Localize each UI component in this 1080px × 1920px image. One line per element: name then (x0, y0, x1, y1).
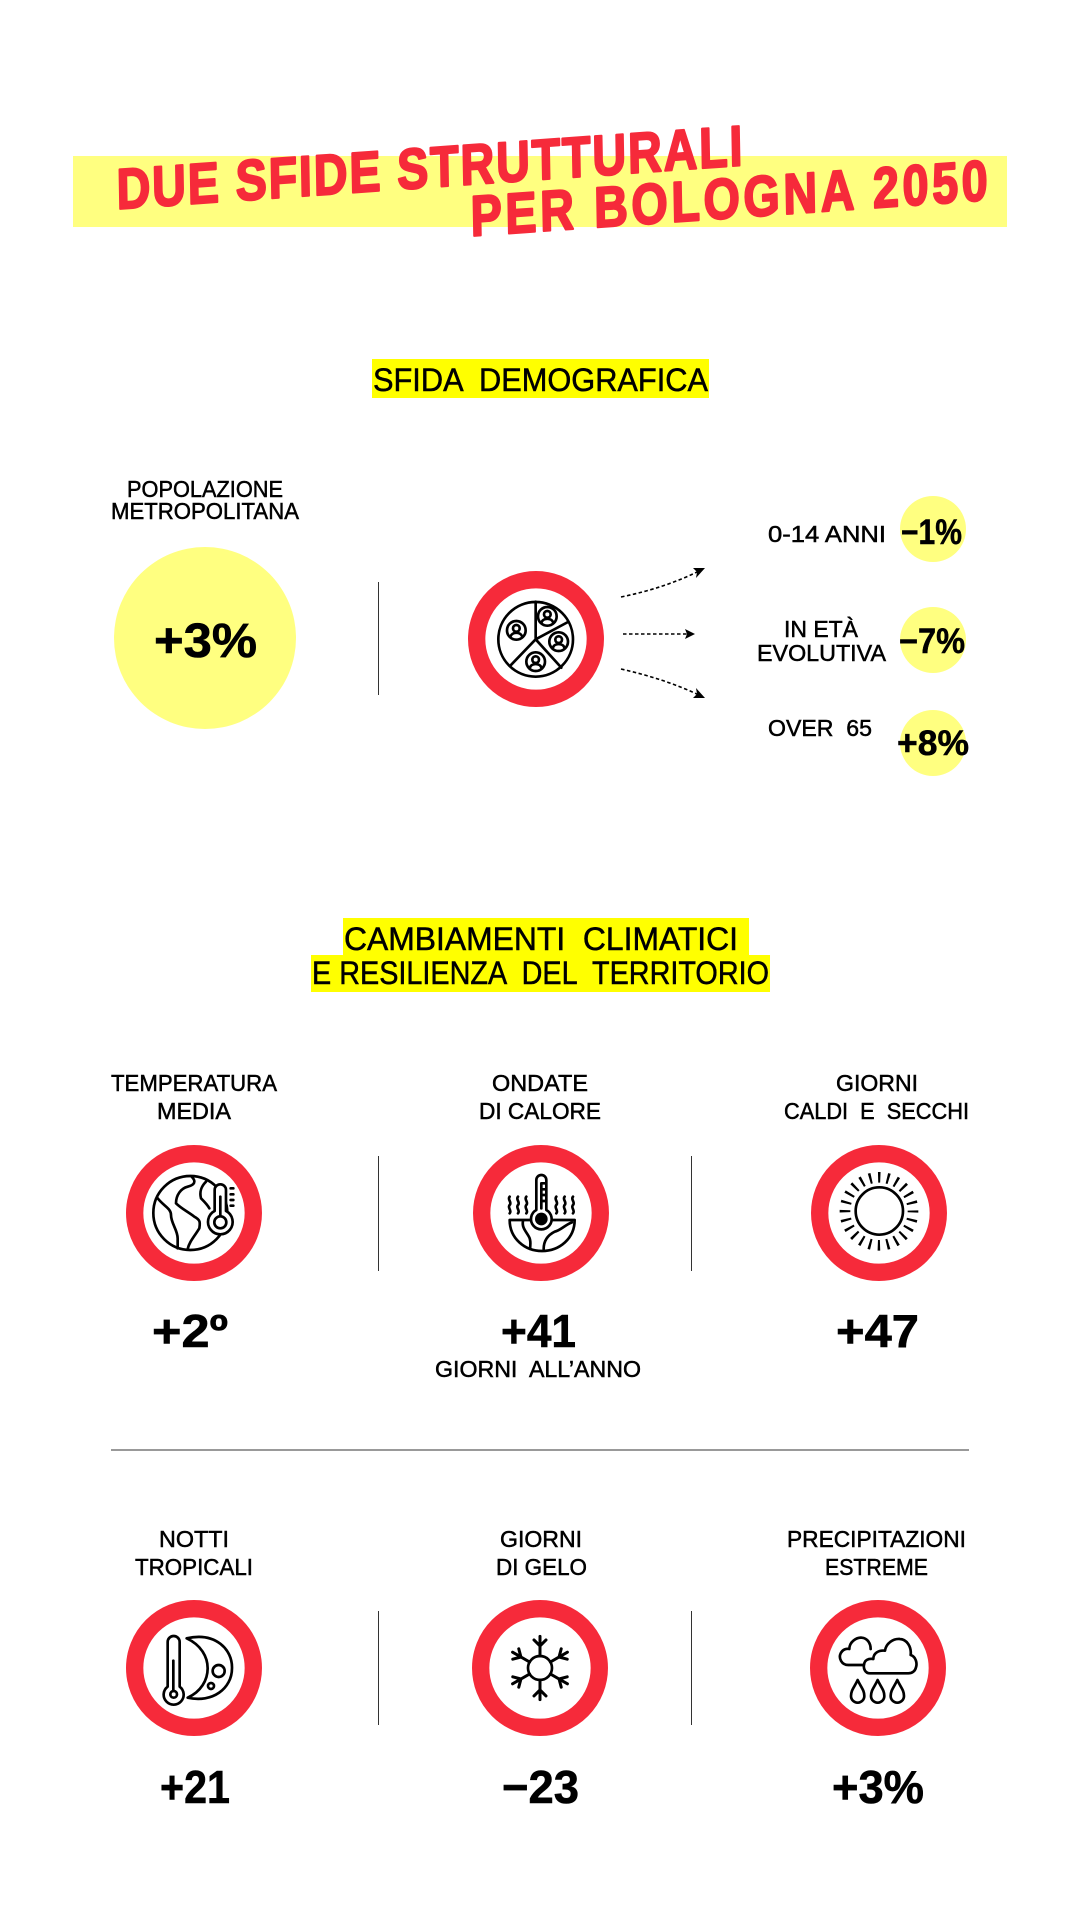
icon: thermometer on hot earth (482, 1154, 600, 1272)
title band with two-line title (73, 115, 1007, 249)
row: in eta evolutiva: EVOLUTIVA (757, 640, 887, 666)
heading: sfida demografica: SFIDA DEMOGRAFICA (373, 362, 709, 398)
row: over 65 (768, 710, 969, 776)
panel: temperatura media (111, 1070, 278, 1357)
label (479, 1070, 601, 1124)
row: in eta evolutiva (757, 607, 966, 673)
heading: cambiamenti climatici (311, 918, 770, 992)
icon: clouds and rain drops (819, 1609, 937, 1727)
unit: giorni all'anno: GIORNI ALL’ANNO (435, 1356, 641, 1382)
label: TEMPERATURA (111, 1070, 278, 1096)
row: 0-14 anni: −1% (901, 513, 962, 552)
heading: cambiamenti climatici: E RESILIENZA DEL TERRITORIO (312, 955, 769, 991)
label: GIORNI (836, 1070, 918, 1096)
heading: cambiamenti climatici: CAMBIAMENTI CLIMATICI (344, 921, 738, 957)
panel: precipitazioni estreme (787, 1526, 966, 1813)
label: popolazione metropolitana (111, 476, 300, 524)
arrow: to in eta evolutiva (623, 629, 695, 639)
panel: notti tropicali (135, 1526, 253, 1813)
label: MEDIA (157, 1098, 232, 1124)
yellow circle with +3% (114, 547, 296, 729)
label: DI CALORE (479, 1098, 601, 1124)
value: +3% (832, 1761, 924, 1813)
value: +2º (152, 1305, 228, 1357)
label (496, 1526, 587, 1580)
panel: giorni caldi e secchi (784, 1070, 969, 1357)
row: 0-14 anni (768, 496, 966, 562)
panel: giorni di gelo (481, 1526, 599, 1813)
row: over 65: +8% (897, 724, 969, 763)
label: ESTREME (825, 1554, 928, 1580)
value: +47 (836, 1305, 919, 1357)
row: in eta evolutiva: IN ETÀ (784, 616, 859, 642)
label: PRECIPITAZIONI (787, 1526, 966, 1552)
icon: sun (820, 1154, 938, 1272)
icon: population pie chart (477, 580, 595, 698)
label: GIORNI (500, 1526, 582, 1552)
label (135, 1526, 253, 1580)
panel: ondate di calore (435, 1070, 641, 1382)
label: popolazione metropolitana: POPOLAZIONE (127, 476, 283, 502)
label: TROPICALI (135, 1554, 253, 1580)
value: +41 (501, 1305, 576, 1357)
arrow: to 0-14 anni (621, 568, 705, 597)
row: over 65: OVER 65 (768, 715, 872, 741)
label: popolazione metropolitana: METROPOLITANA (111, 498, 300, 524)
label: CALDI E SECCHI (784, 1098, 969, 1124)
label: DI GELO (496, 1554, 587, 1580)
label (784, 1070, 969, 1124)
label: ONDATE (492, 1070, 588, 1096)
title band with two-line title: PER BOLOGNA 2050 (470, 150, 988, 249)
label (111, 1070, 278, 1124)
icon: thermometer and moon (135, 1609, 253, 1727)
icon: snowflake (481, 1609, 599, 1727)
value: +21 (160, 1761, 230, 1813)
title band with two-line title: DUE SFIDE STRUTTURALI (116, 115, 743, 222)
value: −23 (502, 1761, 579, 1813)
arrow: to over 65 (621, 669, 705, 698)
row: in eta evolutiva: −7% (899, 622, 965, 661)
label (787, 1526, 966, 1580)
label: NOTTI (159, 1526, 229, 1552)
panel: popolazione metropolitana (111, 476, 300, 729)
row: 0-14 anni: 0-14 ANNI (768, 521, 886, 547)
icon: globe with thermometer (135, 1154, 253, 1272)
yellow circle with +3%: +3% (154, 615, 257, 668)
